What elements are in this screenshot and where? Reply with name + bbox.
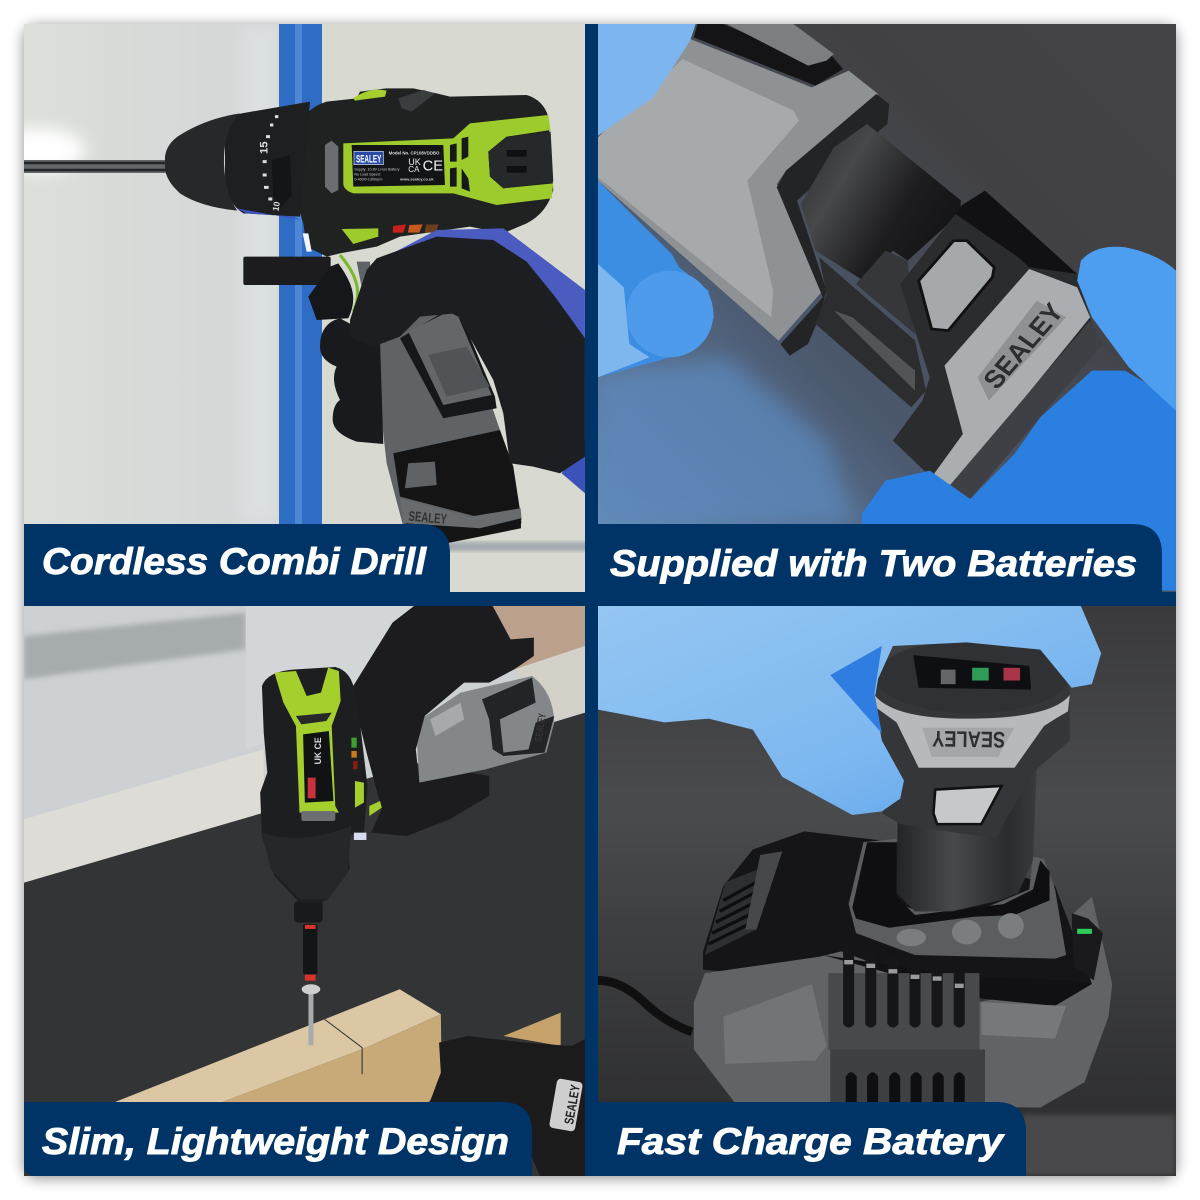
icon: wrist patch — [520, 1078, 585, 1176]
icon: grey handle: SEALEY — [534, 713, 549, 742]
icon: blue gloves — [598, 24, 1176, 591]
icon: battery head: SEALEY — [932, 726, 1005, 753]
caption: supplied with two batteries — [598, 524, 1162, 592]
icon: battery head — [893, 191, 1103, 499]
icon: impact driver body: UK CE — [313, 737, 323, 764]
icon: drill body: 0-400/0-1300rpm — [354, 178, 382, 182]
icon: battery stem — [801, 124, 961, 407]
surface reflection — [598, 357, 856, 524]
icon: battery head: SEALEY — [977, 298, 1070, 394]
caption: supplied with two batteries: Supplied with Two Batteries — [610, 543, 1137, 584]
icon: battery stem — [897, 770, 1037, 911]
pipe bracket — [243, 257, 331, 285]
icon: drill body: www.sealey.co.uk — [399, 177, 434, 182]
icon: tool handle — [598, 24, 889, 356]
icon: battery: SEALEY — [408, 508, 448, 527]
caption: slim lightweight design: Slim, Lightweight Design — [42, 1121, 509, 1162]
icon: drill grip — [357, 262, 522, 542]
icon: wrist patch: SEALEY — [561, 1083, 583, 1126]
icon: blue glove — [598, 606, 1101, 815]
icon: drill body: No Load Speed: — [354, 173, 381, 177]
caption: fast charge battery — [585, 1102, 1026, 1176]
icon: drill body: Supply: 10.8V Li-ion Battery — [354, 168, 400, 172]
icon: screwdriver bit — [294, 901, 323, 1045]
caption: cordless combi drill: Cordless Combi Drill — [42, 541, 427, 582]
icon: wood block — [113, 989, 561, 1103]
charging cable — [598, 980, 692, 1032]
icon: drill body: Model No. CP108VDDBO — [389, 151, 440, 156]
icon: charger base — [694, 831, 1112, 1108]
panel: fast charge battery photo — [598, 606, 1176, 1176]
icon: grey handle — [416, 676, 554, 783]
icon: drill body: SEALEY — [356, 154, 381, 166]
icon: black glove — [353, 606, 534, 836]
icon: impact driver body — [260, 667, 382, 903]
icon: battery head — [874, 641, 1070, 839]
icon: drill body: CA — [408, 165, 420, 174]
icon: drill body: UK — [408, 157, 421, 167]
icon: black glove — [308, 228, 585, 493]
panel: supplied with two batteries photo — [598, 24, 1176, 592]
drill bit — [24, 160, 169, 173]
icon: lower glove — [428, 1036, 585, 1106]
icon: drill body: 10 — [270, 201, 282, 212]
icon: drill body: 15 — [258, 141, 270, 154]
panel: slim lightweight design photo — [24, 606, 585, 1176]
icon: drill body — [165, 88, 553, 257]
blue pipe — [279, 24, 322, 524]
caption: fast charge battery: Fast Charge Battery — [617, 1121, 1006, 1162]
caption: cordless combi drill — [24, 524, 450, 592]
icon: charger collar — [849, 839, 1066, 959]
wall and floor — [24, 606, 585, 883]
icon: drill body: CE — [423, 159, 443, 175]
icon: battery — [393, 430, 522, 543]
caption: slim lightweight design — [24, 1102, 532, 1176]
panel: cordless combi drill photo — [0, 24, 590, 592]
bench reflection — [1003, 1115, 1176, 1176]
